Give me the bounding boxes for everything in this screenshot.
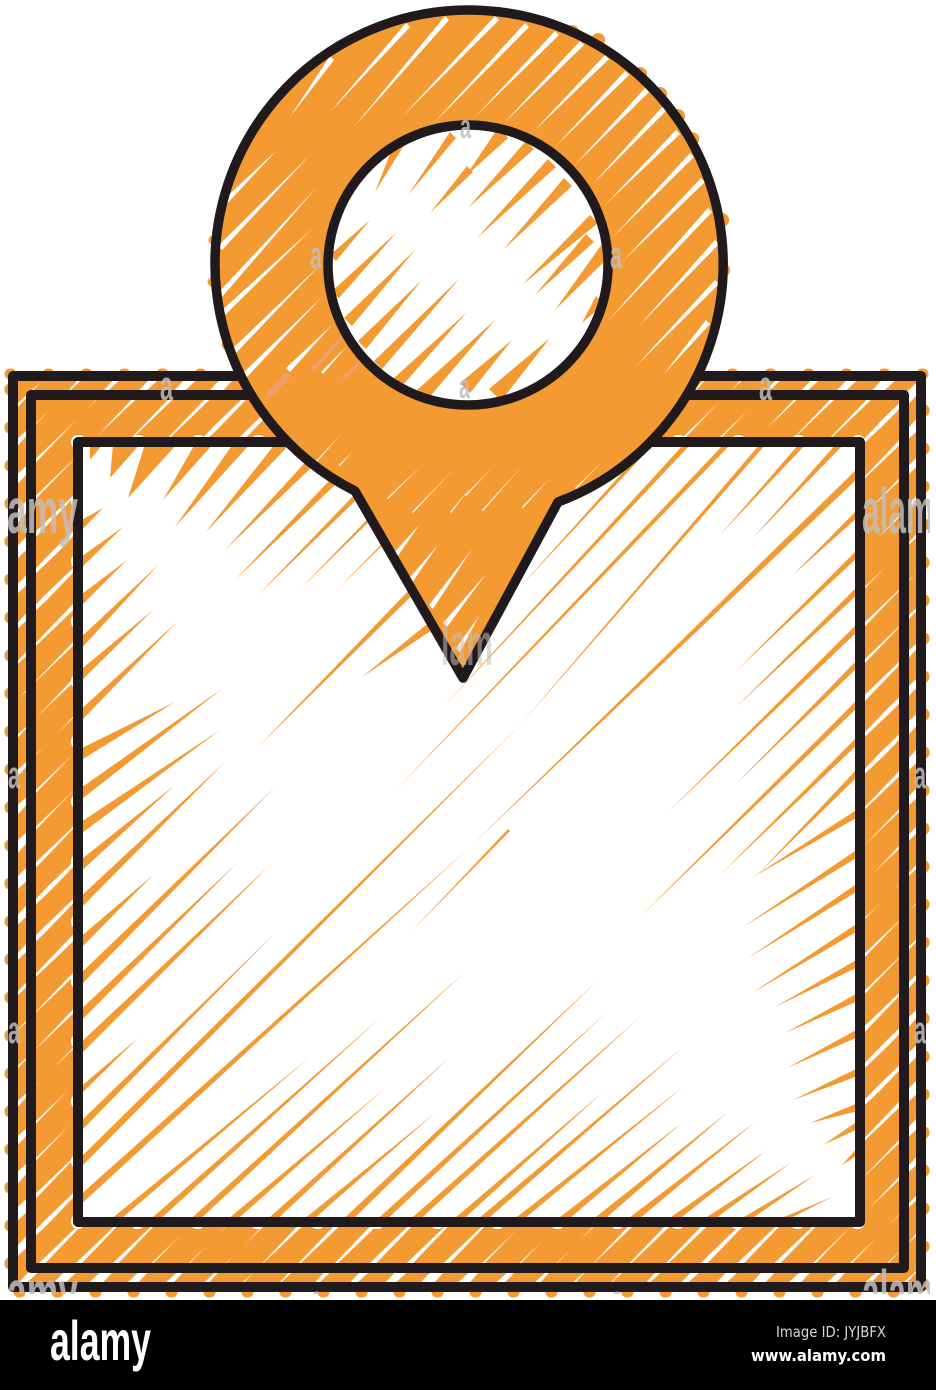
pink streaks <box>265 336 362 398</box>
top edge streaks <box>90 444 844 793</box>
pin white hatching <box>218 16 719 652</box>
watermarks: a <box>610 235 622 277</box>
frame second outline <box>31 395 904 1268</box>
watermarks: a <box>459 368 471 406</box>
left slashes <box>218 150 347 377</box>
watermarks: amy <box>7 475 78 547</box>
pin outline <box>215 10 723 678</box>
location pin <box>212 10 723 678</box>
hole outline <box>328 125 608 405</box>
watermarks: lam <box>441 611 493 678</box>
watermarks: a <box>8 755 20 797</box>
watermarks: a <box>160 362 173 409</box>
watermarks: a <box>611 1279 623 1321</box>
pin orange body <box>215 10 723 678</box>
watermarks: a <box>914 1010 926 1052</box>
frame scribble bumps <box>10 374 924 1292</box>
pin centre hole <box>328 125 612 405</box>
website: www.alamy.com <box>751 1346 886 1365</box>
pin tip slashes <box>391 524 486 652</box>
hole orange streaks <box>330 128 612 401</box>
footer bar <box>0 1300 936 1390</box>
footer logo: alamy <box>50 1309 151 1372</box>
watermarks: a <box>914 755 926 797</box>
image id: Image ID: JYJBFX <box>776 1323 886 1341</box>
frame outer white-hatched strip <box>22 385 912 1278</box>
watermarks: a <box>311 1279 323 1321</box>
upper slashes <box>290 16 719 375</box>
frame window outline <box>78 442 860 1222</box>
watermarks: a <box>759 362 772 409</box>
window edge bumps <box>78 442 858 1222</box>
right edge streaks <box>470 468 858 1165</box>
square frame <box>10 374 924 1292</box>
faint centre line <box>410 829 510 933</box>
left edge streaks <box>78 508 520 1207</box>
watermarks: amy <box>7 1257 78 1329</box>
watermarks: a <box>8 1010 20 1052</box>
frame window <box>78 442 858 1222</box>
frame orange hatched band <box>13 376 921 1287</box>
pin body hairlines <box>315 433 602 513</box>
frame outer outline <box>13 376 921 1287</box>
pin scribble bumps left <box>212 50 342 345</box>
pin scribble bumps right <box>572 32 723 270</box>
watermarks: a <box>460 108 472 146</box>
watermarks: a <box>310 235 322 277</box>
bottom edge streaks <box>105 970 832 1224</box>
window scribble streaks <box>78 444 858 1224</box>
